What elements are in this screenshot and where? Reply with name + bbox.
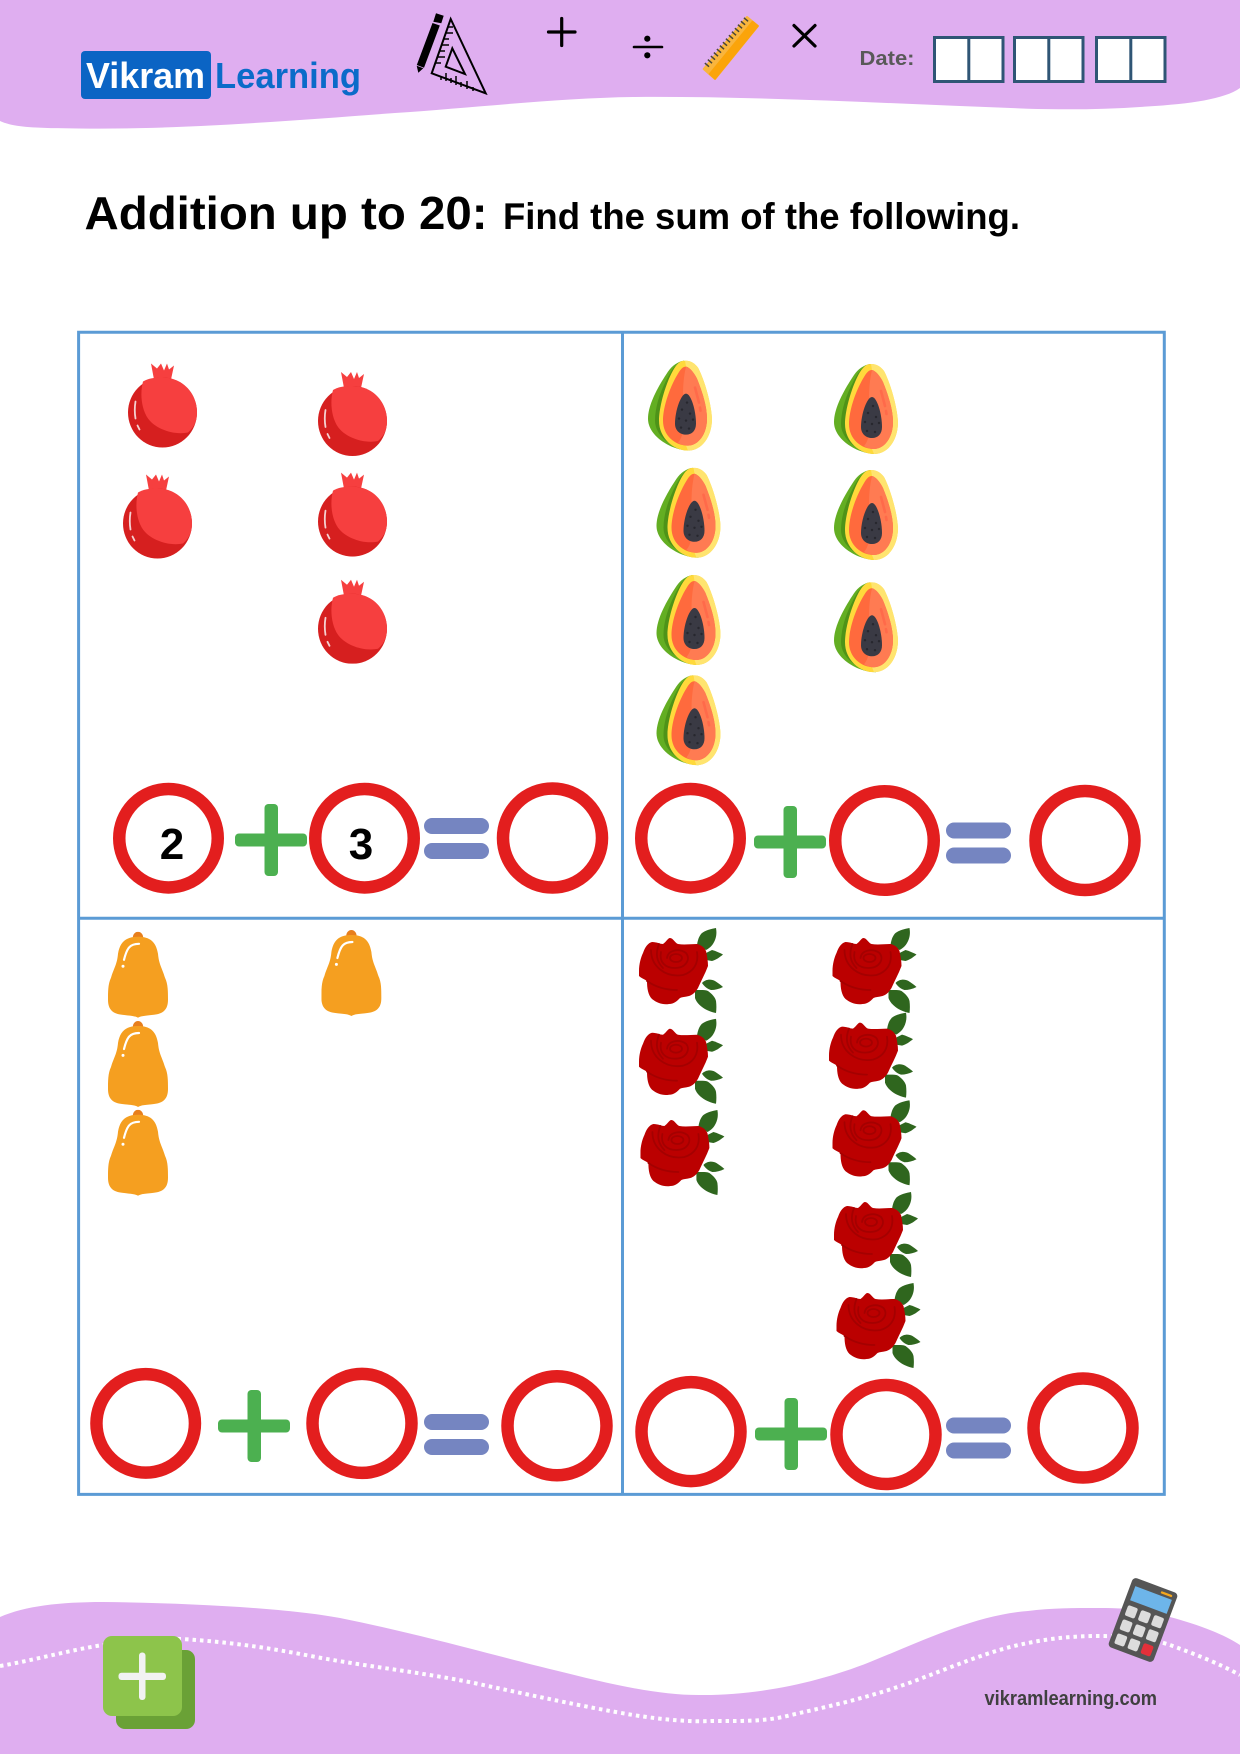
icon: calculator [1108,1577,1178,1663]
icon: plus sign [548,18,575,46]
panel: roses [639,928,1132,1484]
header band [0,0,1240,129]
worksheet grid [79,332,1164,1494]
equation row [642,1378,1132,1484]
rose group: second addend [829,928,920,1368]
equation row [96,1374,606,1475]
pomegranate group: first addend [123,364,197,558]
website: vikramlearning.com [984,1688,1157,1710]
pear group: first addend [108,932,168,1196]
equation row: 2 [160,820,184,869]
date label: Date: [860,48,914,70]
rose group: first addend [639,928,724,1195]
papaya group: second addend [834,364,898,672]
icon: pencil and set square [417,13,486,93]
icon: green plus card [103,1636,195,1729]
equation row [119,788,602,888]
icon: divide sign [634,36,662,58]
pomegranate group: second addend [318,372,387,664]
icon: times sign [794,26,815,46]
footer band [0,1602,1240,1754]
title: Addition up to 20: [84,187,488,239]
pear group: second addend [321,930,381,1016]
equation row [641,789,1134,890]
panel: papayas [641,361,1134,890]
icon: ruler [704,17,758,79]
title [84,187,1020,239]
date boxes [934,38,1165,82]
panel: pears [96,930,606,1475]
logo: VikramLearning: Learning [215,55,361,96]
title: Find the sum of the following. [503,196,1020,237]
panel: pomegranates 2 + 3 [119,364,602,888]
equation row: 3 [349,820,373,869]
papaya group: first addend [648,361,720,765]
logo: VikramLearning [81,51,361,99]
logo: VikramLearning: Vikram [86,55,205,96]
